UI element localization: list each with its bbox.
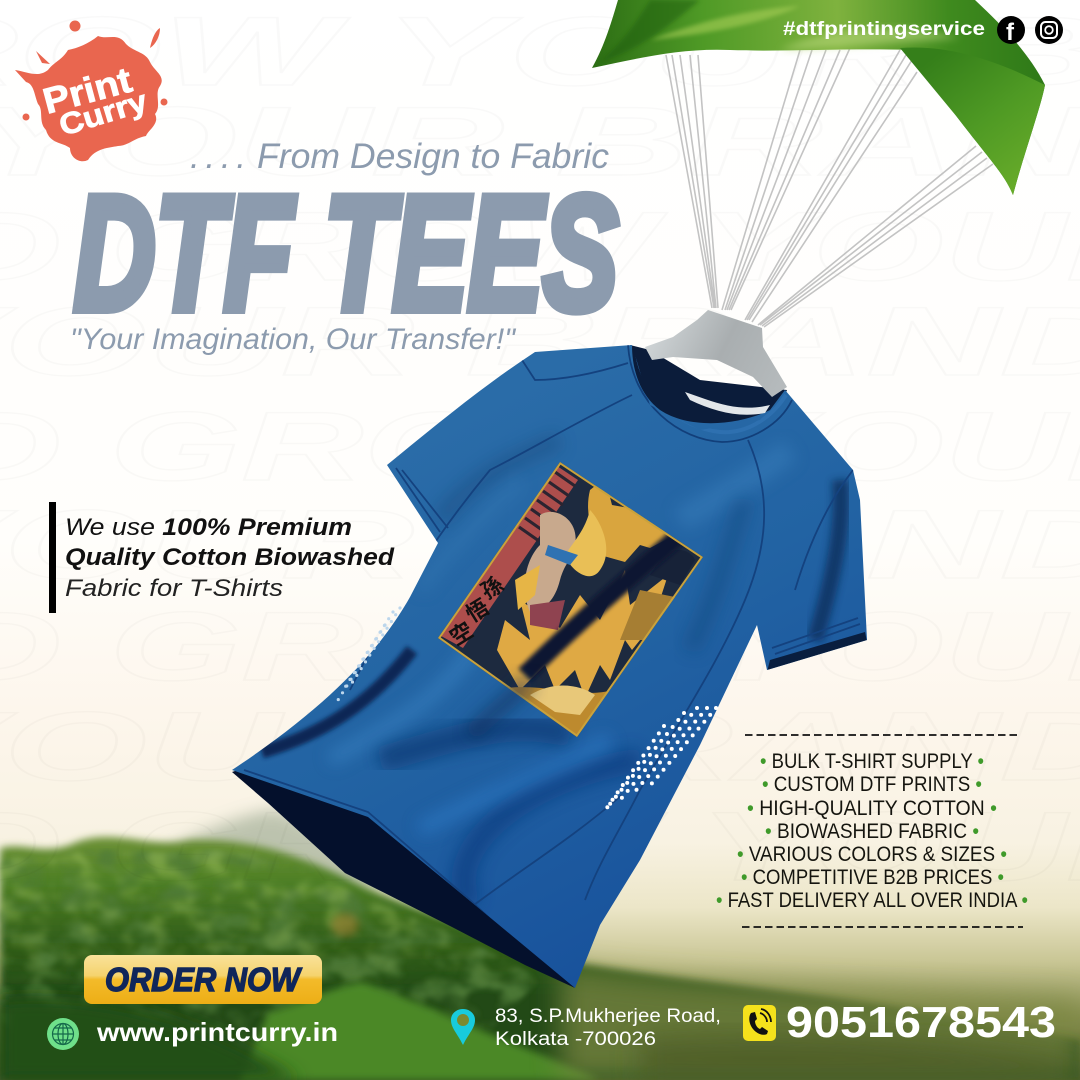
- order now button: ORDER NOW: [105, 961, 303, 998]
- icon: globe: [47, 1018, 79, 1050]
- red strip: [441, 466, 578, 648]
- seams: [244, 345, 860, 972]
- logo: Print Curry splash: Curry: [55, 85, 151, 143]
- subtitle: From Design to Fabric: [257, 137, 609, 176]
- leaf with parachute strings: [592, 0, 1045, 327]
- chinese title: 孫: [474, 567, 509, 606]
- shadow continuing below print: [470, 680, 530, 735]
- callout: fabric quality: Fabric for T-Shirts: [65, 575, 283, 602]
- features list: • BIOWASHED FABRIC •: [765, 820, 979, 843]
- address: Kolkata -700026: [495, 1029, 656, 1050]
- hanger: [645, 310, 787, 397]
- dark diagonal shadow: [525, 535, 680, 675]
- icon: location pin: [451, 1009, 475, 1045]
- features list: • FAST DELIVERY ALL OVER INDIA •: [716, 889, 1028, 912]
- folds and shading: [262, 440, 867, 905]
- t-shirt on hanger: [232, 310, 867, 988]
- perforated dots: right side: [604, 708, 716, 812]
- features list: • BULK T-SHIRT SUPPLY •: [760, 750, 984, 773]
- subtitle: . . . .: [190, 137, 246, 176]
- address: 83, S.P.Mukherjee Road,: [495, 1006, 721, 1027]
- features list: • VARIOUS COLORS & SIZES •: [737, 843, 1007, 866]
- print: anime graphic: 悟: [459, 590, 494, 629]
- hashtag: #dtfprintingservice: [783, 19, 985, 40]
- icon: instagram: [1035, 16, 1063, 44]
- website: www.printcurry.in: [96, 1017, 338, 1047]
- icon: facebook: f: [1006, 19, 1015, 46]
- tagline: "Your Imagination, Our Transfer!": [70, 323, 516, 356]
- icon: facebook: [997, 16, 1025, 46]
- shirt body: [232, 345, 867, 988]
- icon: phone: [743, 1005, 776, 1041]
- print border: [438, 462, 703, 737]
- neck interior: [630, 345, 787, 445]
- features list: • CUSTOM DTF PRINTS •: [762, 773, 982, 796]
- hem inner: [232, 766, 575, 988]
- figure: [525, 512, 576, 612]
- features list: [716, 735, 1028, 927]
- callout: fabric quality: We use 100% Premium: [65, 514, 352, 541]
- features list: • COMPETITIVE B2B PRICES •: [741, 866, 1004, 889]
- ghost outlined background text: YOUR BRAND GROW: [0, 86, 1080, 196]
- address: [495, 1006, 721, 1050]
- features list: • HIGH-QUALITY COTTON •: [747, 797, 997, 820]
- callout: fabric quality: Quality Cotton Biowashed: [65, 544, 395, 571]
- print: anime graphic: 空: [443, 613, 478, 652]
- perforated dots: left side: [338, 608, 400, 700]
- callout: fabric quality: [49, 502, 395, 613]
- logo: Print Curry splash: Print: [38, 59, 136, 122]
- print: anime graphic: [438, 462, 703, 737]
- logo: Print Curry splash: [15, 20, 168, 161]
- hair and gold shapes: [497, 570, 668, 698]
- phone number: 9051678543: [786, 998, 1056, 1047]
- order now button: [84, 955, 322, 1004]
- main title: DTF TEES: [74, 163, 618, 344]
- neck label stripe: [685, 392, 770, 415]
